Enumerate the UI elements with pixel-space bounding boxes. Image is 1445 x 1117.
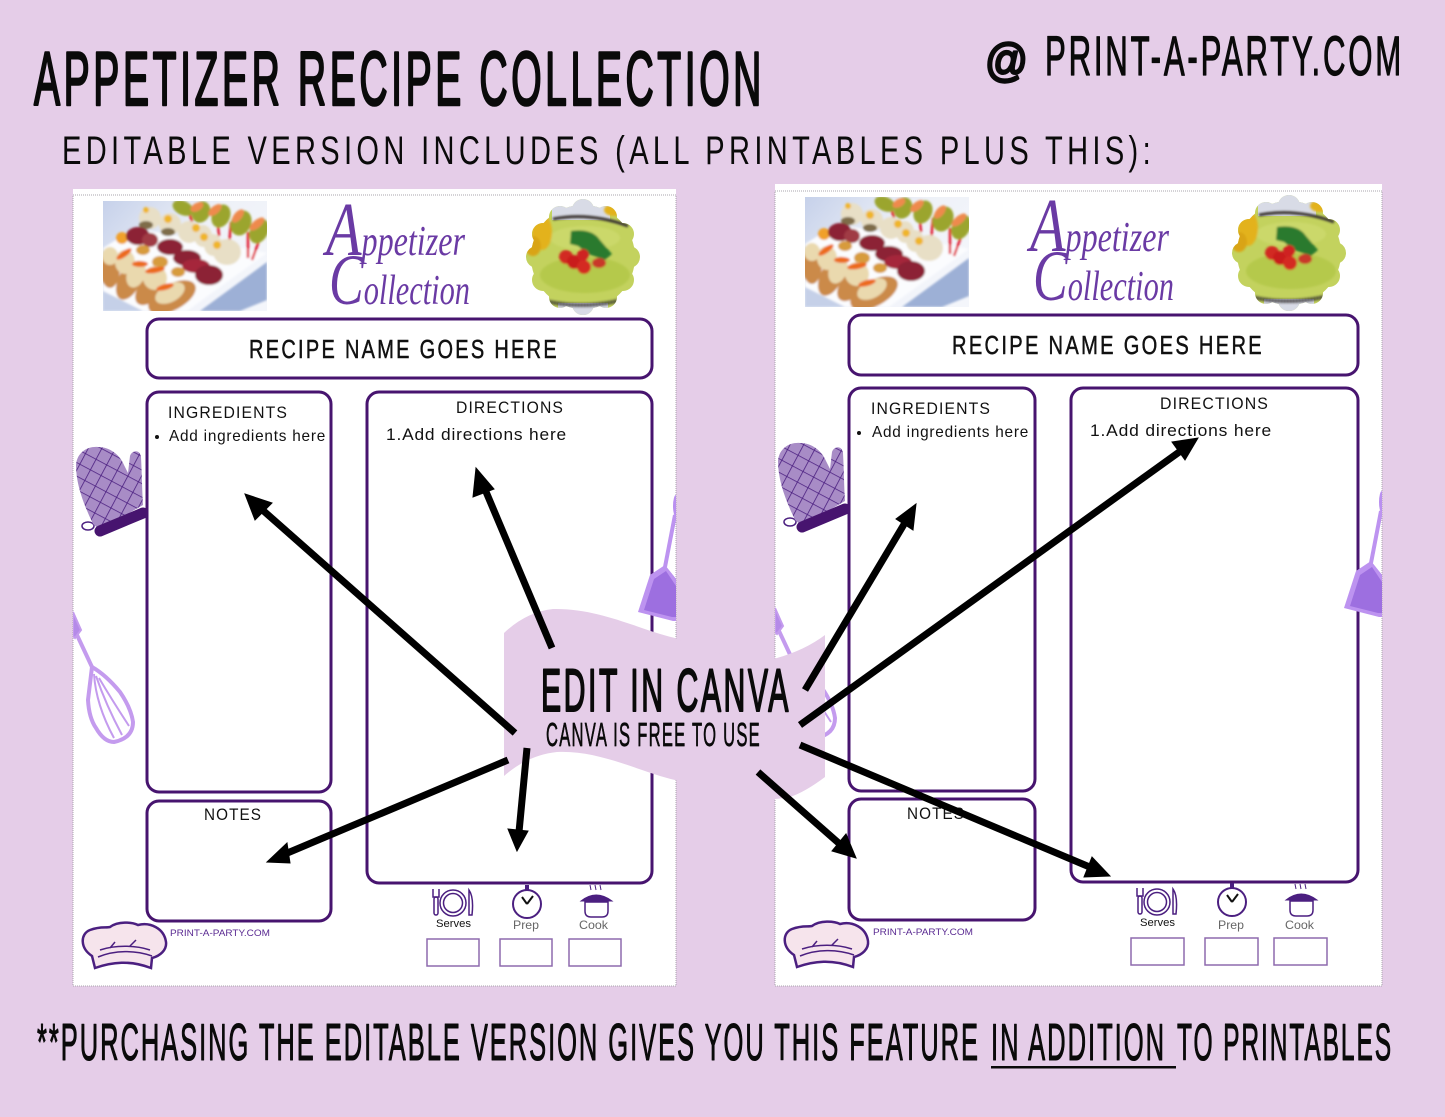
ingredients box <box>849 388 1035 791</box>
ingredients box <box>147 392 331 792</box>
script title: Appetizer <box>1026 184 1169 268</box>
cook block <box>1274 884 1327 965</box>
icon: chef hat <box>785 922 868 967</box>
ingredients box: Add ingredients here <box>872 424 1029 441</box>
notes box <box>849 799 1035 920</box>
cook block: Cook <box>1285 918 1315 932</box>
callout: edit in canva banner <box>504 609 825 799</box>
directions box: 1.Add directions here <box>386 425 567 444</box>
panel: right recipe page <box>775 184 1385 986</box>
cook block <box>569 885 621 966</box>
icon: whisk <box>73 612 133 742</box>
arrow: to notes (left) <box>267 760 508 863</box>
prep block <box>1205 883 1258 965</box>
cook block: Cook <box>579 918 609 932</box>
arrow: to directions bottom (right) <box>800 745 1110 877</box>
serves block <box>1131 888 1184 965</box>
recipe name box: RECIPE NAME GOES HERE <box>249 334 559 364</box>
food photo: appetizer platter <box>100 197 273 321</box>
arrow: to directions bottom (left) <box>508 748 528 851</box>
script title <box>322 188 470 320</box>
script title: Collection <box>1033 236 1174 316</box>
script title: Appetizer <box>322 188 465 272</box>
food photo: appetizer platter <box>802 193 975 317</box>
ingredients box: INGREDIENTS <box>168 403 288 422</box>
prep block: Prep <box>1218 918 1244 932</box>
recipe name box <box>849 315 1358 375</box>
icon: chef hat <box>83 923 166 968</box>
directions box <box>367 392 652 883</box>
callout: edit in canva banner: CANVA IS FREE TO USE <box>546 716 761 753</box>
notes box: NOTES <box>907 804 965 823</box>
arrow: to notes (right) <box>758 772 856 858</box>
food photo: guacamole <box>1226 191 1352 316</box>
icon: oven mitt <box>778 443 845 527</box>
panel: left recipe page <box>73 188 679 986</box>
site label: PRINT-A-PARTY.COM <box>170 928 270 938</box>
notes box <box>147 801 331 921</box>
footer note: IN ADDITION <box>991 1014 1166 1072</box>
arrow: to ingredients (right) <box>805 504 916 690</box>
ingredients box: INGREDIENTS <box>871 399 991 418</box>
recipe name box <box>147 319 652 378</box>
site label: PRINT-A-PARTY.COM <box>873 927 973 937</box>
prep block: Prep <box>513 918 539 932</box>
prep block <box>500 885 552 966</box>
notes box: NOTES <box>204 805 262 824</box>
callout: edit in canva banner: EDIT IN CANVA <box>541 657 791 724</box>
serves block <box>427 889 479 966</box>
icon: spatula <box>638 495 679 621</box>
title: APPETIZER RECIPE COLLECTION <box>34 37 765 122</box>
directions box: DIRECTIONS <box>1160 394 1269 413</box>
website credit: @ <box>985 34 1028 86</box>
ingredients box: Add ingredients here <box>169 428 326 445</box>
serves block: Serves <box>1140 917 1175 929</box>
arrow: to ingredients (left) <box>245 494 515 733</box>
serves block: Serves <box>436 918 471 930</box>
recipe name box: RECIPE NAME GOES HERE <box>952 330 1264 360</box>
arrow: to directions (left) <box>473 468 552 648</box>
icon: oven mitt <box>76 447 143 531</box>
script title: Collection <box>329 240 470 320</box>
directions box: 1.Add directions here <box>1090 421 1272 440</box>
directions box: DIRECTIONS <box>456 398 564 417</box>
arrow: to directions (right) <box>800 438 1198 725</box>
icon: whisk <box>775 608 835 738</box>
food photo: guacamole <box>520 195 646 320</box>
script title <box>1026 184 1174 316</box>
icon: spatula <box>1344 491 1385 617</box>
directions box <box>1071 388 1358 882</box>
